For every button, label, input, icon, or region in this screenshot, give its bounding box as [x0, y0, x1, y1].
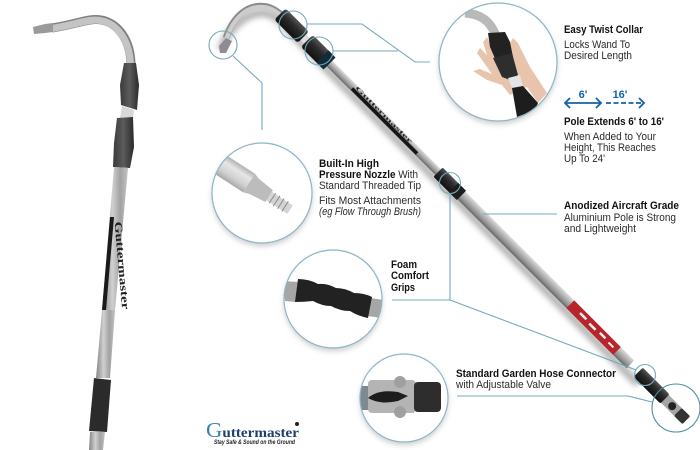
curved tube [226, 6, 284, 38]
callout leader lines and small target circles [209, 11, 700, 432]
mid collar [433, 167, 466, 200]
brand text on pole: Guttermaster [112, 221, 131, 310]
detail circle: hose connector [358, 354, 448, 445]
detail circle: foam grip [283, 250, 384, 351]
icon: upper twist collar [120, 63, 139, 110]
text block: pole extends: Pole Extends 6' to 16' [564, 116, 664, 128]
length arrows: 6' to 16': 16' [613, 89, 628, 101]
bottom grip [634, 368, 670, 404]
text block: hose connector [455, 368, 617, 391]
brand band [351, 87, 418, 155]
black band on pole [102, 217, 114, 310]
text block: pole extends: Up To 24' [564, 153, 605, 165]
detail circle: nozzle [193, 141, 312, 246]
text block: nozzle: Fits Most Attachments [319, 195, 421, 207]
text block: anodized pole [564, 200, 679, 235]
product photo: full-length pole on the left [33, 20, 139, 450]
text block: easy twist collar: Locks Wand To [564, 39, 630, 51]
icon: lower twist collar [113, 117, 134, 168]
main pole diagram [219, 6, 691, 425]
text block: nozzle: (eg Flow Through Brush) [319, 206, 421, 218]
text block: pole extends: Height, This Reaches [564, 142, 656, 154]
text block: foam grips: Foam [391, 259, 417, 271]
text block: foam grips: Grips [391, 282, 415, 294]
red label [566, 300, 621, 355]
text block: anodized pole: and Lightweight [564, 223, 636, 235]
text block: pole extends [564, 116, 664, 165]
detail circle: easy twist collar [439, 3, 557, 124]
text block: nozzle: Standard Threaded Tip [319, 180, 421, 192]
logo: Guttermaster: Guttermaster [206, 418, 299, 442]
text block: nozzle: Built-In High [319, 158, 379, 170]
hose connector [661, 395, 682, 416]
straight pole: Guttermaster [354, 85, 414, 146]
text block: easy twist collar [564, 24, 644, 62]
black collars [488, 32, 513, 58]
text block: pole extends: When Added to Your [564, 131, 656, 143]
text block: hose connector: with Adjustable Valve [455, 379, 551, 391]
text block: foam grips [391, 259, 429, 294]
icon: hand [473, 37, 547, 103]
logo: Guttermaster: Stay Safe & Sound on the Ground [214, 440, 295, 446]
text block: easy twist collar: Desired Length [564, 50, 632, 62]
pole shadow [221, 13, 638, 384]
straight pole [325, 59, 691, 425]
grey tube [465, 13, 496, 36]
text block: foam grips: Comfort [391, 270, 429, 282]
text block: nozzle: Pressure Nozzle With [319, 169, 418, 181]
nozzle tip [219, 38, 232, 53]
text block: easy twist collar: Easy Twist Collar [564, 24, 644, 36]
icon: foam grip [89, 378, 111, 432]
text block: anodized pole: Anodized Aircraft Grade [564, 200, 679, 212]
top collars [274, 8, 336, 70]
length arrows: 6' to 16': 6' [579, 89, 588, 101]
length arrows: 6' to 16' [565, 89, 644, 108]
text block: anodized pole: Aluminium Pole is Strong [564, 212, 676, 224]
text block: nozzle [319, 158, 421, 218]
text block: hose connector: Standard Garden Hose Connector [456, 368, 617, 380]
